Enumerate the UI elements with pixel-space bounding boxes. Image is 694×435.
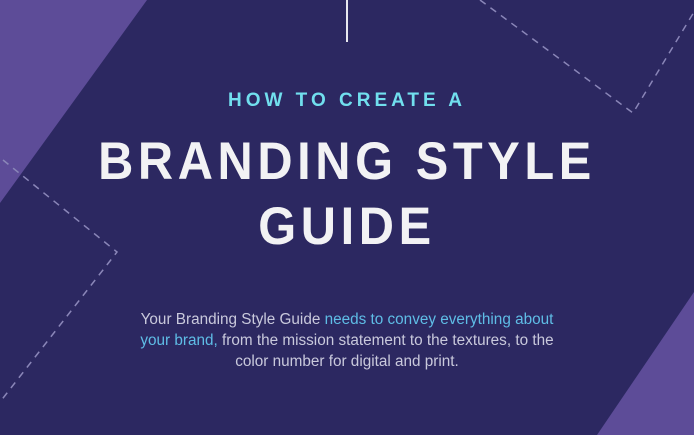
description: color number for digital and print. [235,353,459,370]
title: GUIDE [258,197,436,256]
description: Your Branding Style Guide needs to convey everything about [141,311,553,328]
title: BRANDING STYLE [98,132,596,191]
vertical line top [346,0,348,42]
left purple triangle [0,0,147,203]
dashed line left [0,160,117,402]
dashed line top right [480,0,694,113]
subtitle: HOW TO CREATE A [228,90,466,111]
title [98,132,596,256]
description: your brand, from the mission statement to the textures, to the [140,332,554,349]
right purple triangle [597,292,694,435]
description [140,311,554,370]
